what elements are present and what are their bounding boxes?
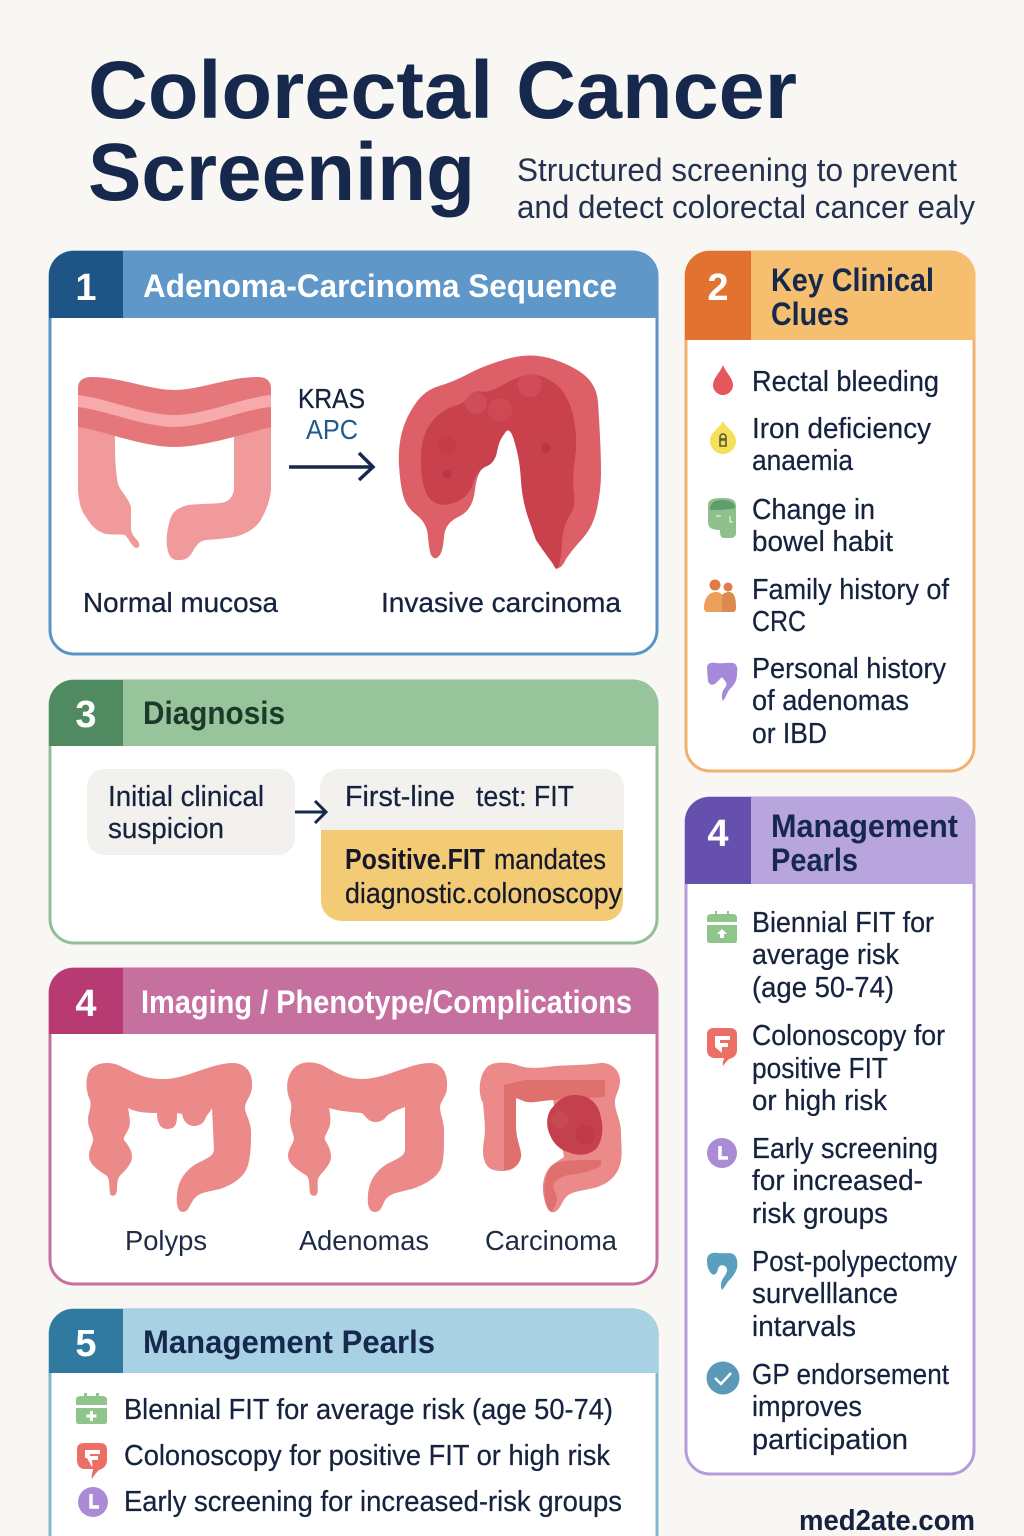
illustration: carcinoma — [480, 1063, 622, 1212]
pearl: GP endorsement: GP endorsement — [752, 1359, 949, 1391]
pearl: GP endorsement: participation — [752, 1424, 908, 1456]
panel: adenoma-carcinoma sequence — [49, 251, 658, 654]
panel header: imaging: 4 — [75, 983, 97, 1025]
gene labels: APC — [306, 414, 358, 445]
box: positive FIT: mandates — [494, 844, 606, 876]
title: Screening — [88, 127, 475, 218]
pearl: post-polypectomy surveillance: survelllance — [752, 1278, 898, 1310]
pearl: early screening: Early screening — [752, 1133, 938, 1165]
pearl: early screening: risk groups — [752, 1198, 888, 1230]
subtitle — [517, 152, 975, 225]
clue: personal history: or IBD — [752, 718, 827, 750]
pearl: post-polypectomy surveillance: intarvals — [752, 1311, 856, 1343]
pearl: colonoscopy: Colonoscopy for — [752, 1020, 945, 1052]
subtitle: and detect colorectal cancer ealy — [517, 189, 975, 225]
label: normal mucosa: Normal mucosa — [83, 587, 278, 618]
pearl: GP endorsement: improves — [752, 1391, 862, 1423]
pearl: colonoscopy — [707, 1020, 945, 1117]
pearl: early screening: Early screening for increased-risk groups — [124, 1486, 622, 1518]
box: positive FIT: diagnostic.colonoscopy — [345, 878, 622, 910]
clue: change in bowel habit: Change in — [752, 494, 875, 526]
panel header: imaging — [49, 968, 658, 1034]
illustration: invasive carcinoma — [399, 355, 601, 569]
clue: change in bowel habit — [708, 494, 893, 558]
panel: imaging, phenotype, complications — [49, 968, 658, 1284]
title: Colorectal Cancer — [88, 45, 797, 136]
box: positive FIT — [321, 830, 623, 921]
panel: management pearls right — [685, 797, 975, 1474]
clue: personal history — [707, 653, 946, 750]
pearl: post-polypectomy surveillance: Post-polypectomy — [752, 1246, 957, 1278]
pearl: biennial FIT: Blennial FIT for average risk (age 50-74) — [124, 1394, 613, 1426]
illustration: normal colon — [78, 377, 271, 560]
panel: key clinical clues — [685, 251, 975, 771]
pearl: biennial FIT: Biennial FIT for — [752, 907, 934, 939]
panel header: clues: Clues — [771, 296, 849, 332]
panel header: pearls bottom: 5 — [75, 1323, 97, 1365]
panel header: sequence — [49, 251, 658, 318]
panel header: pearls right: 4 — [707, 813, 729, 855]
arrow — [289, 453, 373, 480]
panel header: diagnosis — [49, 680, 658, 746]
pearl: early screening: for increased- — [752, 1165, 923, 1197]
clue: family history: Family history of — [752, 574, 950, 606]
clue: personal history: of adenomas — [752, 685, 909, 717]
panel: diagnosis — [49, 680, 658, 943]
panel header: diagnosis: Diagnosis — [143, 695, 285, 731]
panel header: pearls right: Management — [771, 808, 958, 844]
panel header: diagnosis: 3 — [75, 694, 97, 736]
panel header: pearls right — [685, 797, 975, 884]
panel header: clues: Key Clinical — [771, 262, 934, 298]
clue: family history: CRC — [752, 606, 806, 638]
gene labels — [298, 383, 365, 445]
panel header: clues — [685, 251, 975, 340]
clue: rectal bleeding: Rectal bleeding — [752, 366, 939, 398]
label: invasive carcinoma: Invasive carcinoma — [381, 587, 621, 618]
label: adenomas: Adenomas — [299, 1225, 429, 1256]
panel header: clues: 2 — [707, 267, 729, 309]
label: carcinoma: Carcinoma — [485, 1225, 617, 1256]
box: first-line test: test: FIT — [476, 781, 574, 813]
pearl: colonoscopy: positive FIT — [752, 1053, 888, 1085]
subtitle: Structured screening to prevent — [517, 152, 957, 188]
box: positive FIT: Positive.FIT — [345, 844, 485, 876]
illustration: polyps — [86, 1063, 252, 1212]
box: initial clinical suspicion — [87, 769, 295, 855]
clue: iron deficiency anaemia: anaemia — [752, 445, 854, 477]
panel header: pearls bottom: Management Pearls — [143, 1324, 435, 1360]
panel header: pearls bottom — [49, 1309, 658, 1373]
pearl: post-polypectomy surveillance — [707, 1246, 957, 1343]
box: initial clinical suspicion: Initial clinical — [108, 781, 264, 813]
pearl: early screening — [707, 1133, 938, 1230]
clue: personal history: Personal history — [752, 653, 946, 685]
illustration: adenomas — [287, 1062, 447, 1212]
pearl: biennial FIT: average risk — [752, 939, 899, 971]
pearl: colonoscopy: Colonoscopy for positive FIT or high risk — [124, 1440, 610, 1472]
box: initial clinical suspicion: suspicion — [108, 813, 224, 845]
clue: change in bowel habit: bowel habit — [752, 526, 893, 558]
panel: management pearls bottom — [49, 1309, 658, 1536]
pearl: biennial FIT — [707, 907, 934, 1004]
panel header: sequence: 1 — [75, 267, 97, 309]
clue: family history — [704, 574, 950, 638]
box: first-line test — [320, 769, 624, 830]
label: polyps: Polyps — [125, 1225, 207, 1256]
pearl: biennial FIT: (age 50-74) — [752, 972, 894, 1004]
panel header: sequence: Adenoma-Carcinoma Sequence — [143, 268, 617, 304]
pearl: GP endorsement — [706, 1359, 949, 1456]
panel header: imaging: Imaging / Phenotype/Complications — [141, 984, 632, 1020]
clue: iron deficiency anaemia: Iron deficiency — [752, 413, 931, 445]
arrow — [295, 801, 326, 823]
panel header: pearls right: Pearls — [771, 842, 858, 878]
pearl: colonoscopy: or high risk — [752, 1085, 887, 1117]
title — [88, 45, 797, 218]
clue: iron deficiency anaemia — [710, 413, 931, 477]
box: first-line test: First-line — [345, 781, 455, 813]
gene labels: KRAS — [298, 383, 365, 414]
